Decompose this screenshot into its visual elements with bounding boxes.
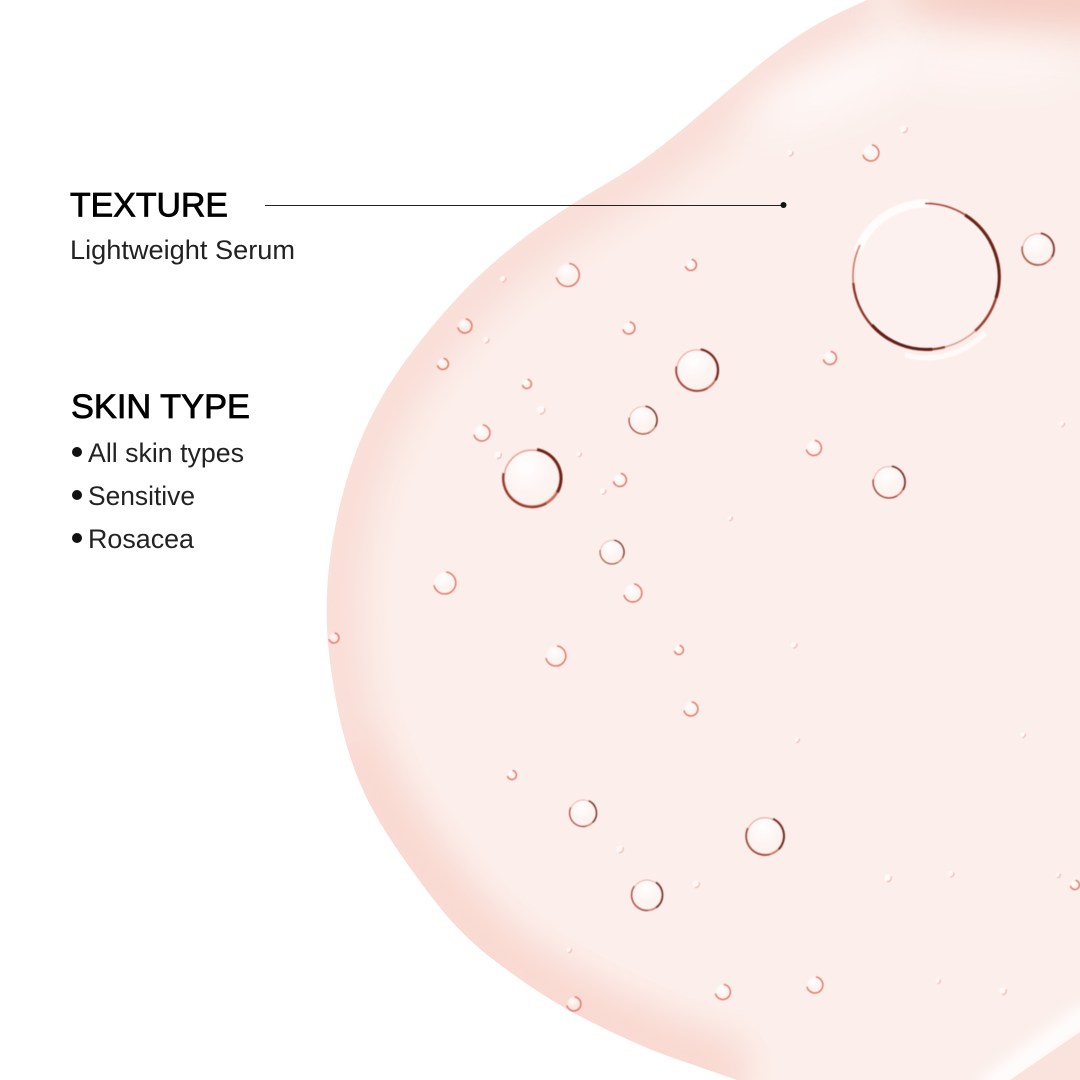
bottom right highlight band [985,1012,1080,1080]
top right corner tint [890,0,1080,31]
skin type list: Sensitive [88,481,195,511]
medium bubbles [503,233,1054,916]
serum edge shading [326,8,875,756]
skin type list: Rosacea [88,524,195,554]
skin type list [72,438,244,554]
large bubble [853,203,999,358]
texture heading: TEXTURE [70,186,228,224]
bottom right corner tint [1010,1032,1080,1080]
texture value: Lightweight Serum [70,235,295,265]
callout leader line [265,202,786,208]
serum swatch [320,0,1080,1080]
surface highlights [753,49,885,118]
skin type heading: SKIN TYPE [71,388,250,426]
skin type list: All skin types [88,438,244,468]
small bubbles [329,126,1080,1011]
lower left edge shading [345,745,737,1080]
